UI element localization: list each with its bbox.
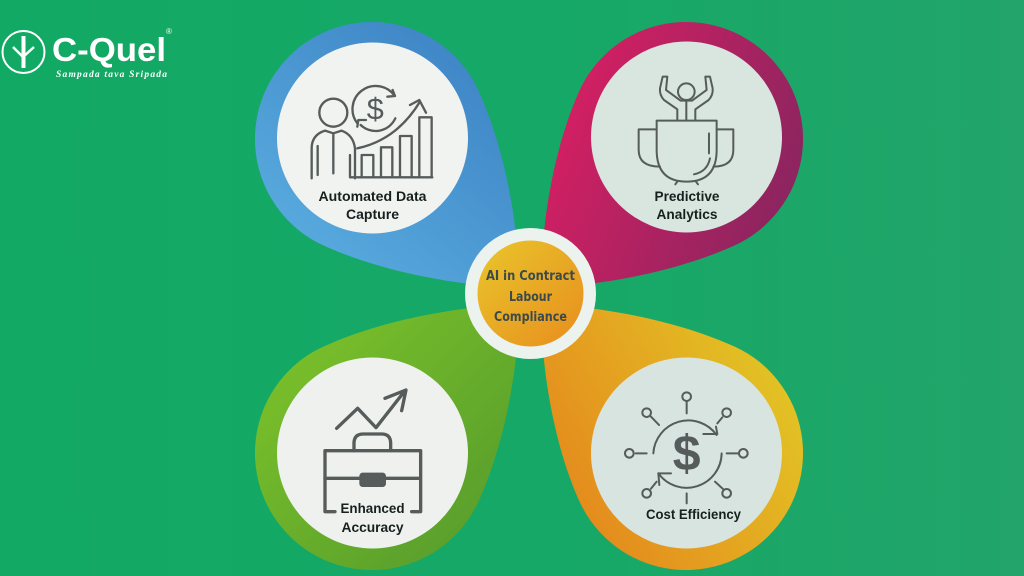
icon: briefcase with rising arrow <box>325 390 421 512</box>
icon: dollar cycle network <box>625 392 748 503</box>
hub title line 3: Compliance <box>494 309 567 325</box>
hub ring <box>465 228 596 359</box>
logo mark <box>2 31 44 73</box>
icon: dollar sign: $ <box>367 92 384 126</box>
label: Enhanced <box>340 500 404 516</box>
petal: blue <box>255 22 519 288</box>
registered mark: ® <box>166 27 172 36</box>
disc <box>277 42 468 234</box>
logo tagline: Sampada tava Sripada <box>56 70 167 80</box>
petal: magenta <box>541 22 803 288</box>
logo <box>2 27 172 80</box>
disc <box>591 42 782 232</box>
panel: cost efficiency <box>591 358 782 548</box>
center hub <box>465 228 596 359</box>
label line 2: Analytics <box>656 206 718 222</box>
icon: dollar sign: $ <box>673 426 701 482</box>
hub disc <box>478 240 584 346</box>
label line 2: Capture <box>346 206 399 222</box>
disc <box>277 358 468 548</box>
panel: automated data capture <box>277 42 468 234</box>
hub title line 2: Labour <box>509 289 552 305</box>
label: Automated Data <box>318 188 427 204</box>
label: Predictive <box>654 188 720 204</box>
panel: predictive analytics <box>591 42 782 232</box>
disc <box>591 358 782 548</box>
petal: green <box>255 304 519 570</box>
label: Cost Efficiency <box>646 506 741 522</box>
icon: businessman with rising bars <box>312 86 432 178</box>
label line 2: Accuracy <box>342 519 404 535</box>
icon: figure rising from cup <box>639 77 733 184</box>
hub title: AI in Contract <box>486 268 575 284</box>
petal: orange <box>541 304 803 570</box>
logo wordmark: C-Quel <box>52 31 166 68</box>
panel: enhanced accuracy <box>277 358 468 548</box>
